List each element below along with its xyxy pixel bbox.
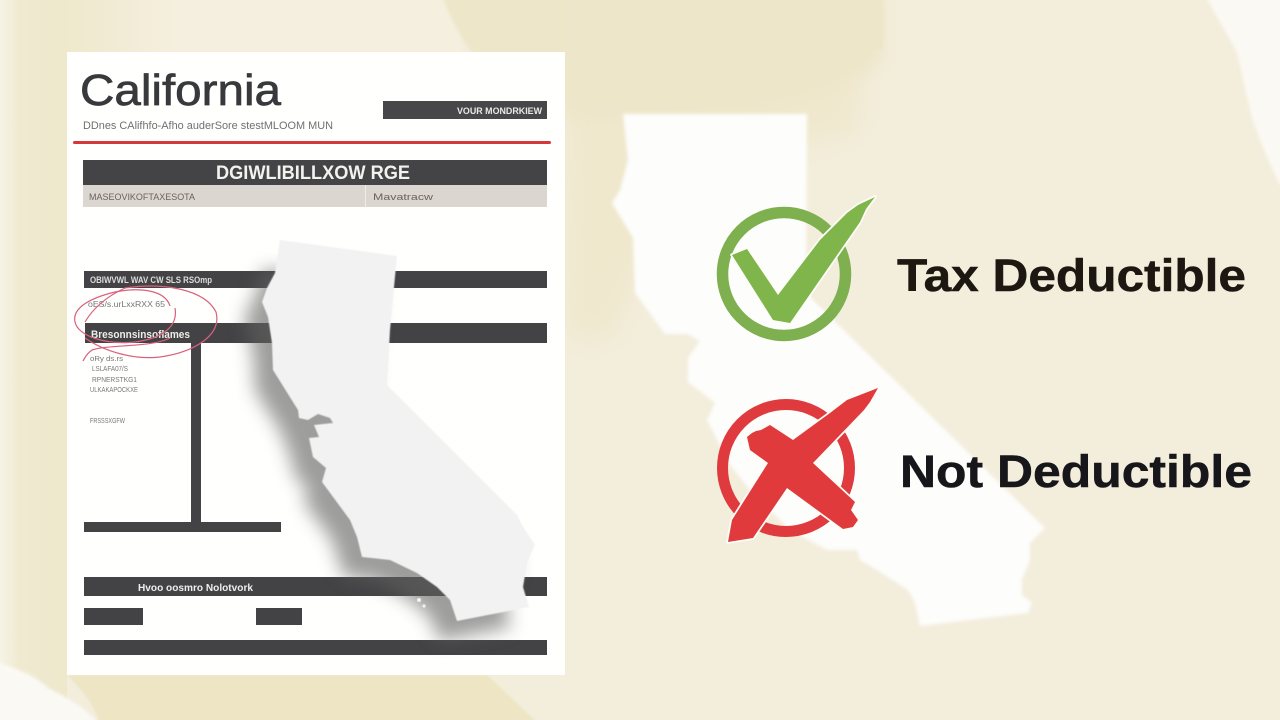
section bar 1 (84, 271, 547, 288)
small line items: FRSSSXGFW (90, 416, 126, 425)
map silhouette (262, 240, 535, 621)
line item text: oES/s.urLxxRXX 65 (88, 299, 165, 309)
form heading bar: DGIWLIBILLXOW RGE (216, 163, 410, 184)
document title: California (80, 66, 282, 115)
map shadow (244, 270, 517, 641)
label: tax deductible: Tax Deductible (897, 250, 1246, 301)
header tag (383, 101, 547, 119)
right California silhouette (612, 114, 1045, 626)
small line items (90, 354, 138, 425)
paper sheet (67, 52, 565, 675)
form column headers (83, 185, 547, 207)
small line items: oRy ds.rs (90, 354, 123, 363)
icon: green check in circle (722, 197, 875, 336)
footer bar (84, 577, 547, 596)
footer total bar (84, 640, 547, 655)
table rule vertical (191, 343, 201, 522)
icon: red cross in circle (722, 388, 878, 542)
footer box middle (256, 608, 302, 625)
section bar 2: Bresonnsinsoflames (91, 329, 190, 341)
footer bar: Hvoo oosmro Nolotvork (138, 582, 253, 594)
small line items: LSLAFA07/S (92, 364, 128, 373)
small line items: RPNERSTKG1 (92, 375, 137, 384)
document: California form (67, 52, 565, 675)
footer box left (84, 608, 143, 625)
red divider (73, 141, 551, 144)
label: not deductible: Not Deductible (900, 446, 1252, 497)
form column headers: Mavatracw (373, 192, 434, 202)
table rule horizontal (84, 522, 281, 532)
map on document with drop shadow (244, 240, 535, 641)
form column headers: MASEOVIKOFTAXESOTA (89, 192, 195, 202)
channel islands (417, 598, 426, 608)
header tag: VOUR MONDRKIEW (457, 106, 542, 117)
form heading bar (83, 160, 547, 185)
red hand-drawn circles (75, 286, 217, 361)
small line items: ULKAKAPOCKXE (90, 385, 138, 394)
section bar 2 (85, 323, 547, 343)
section bar 1: OBIWVWL WAV CW SLS RSOmp (90, 275, 212, 285)
subtitle: DDnes CAlifhfo-Afho auderSore stestMLOOM MUN (83, 120, 333, 132)
